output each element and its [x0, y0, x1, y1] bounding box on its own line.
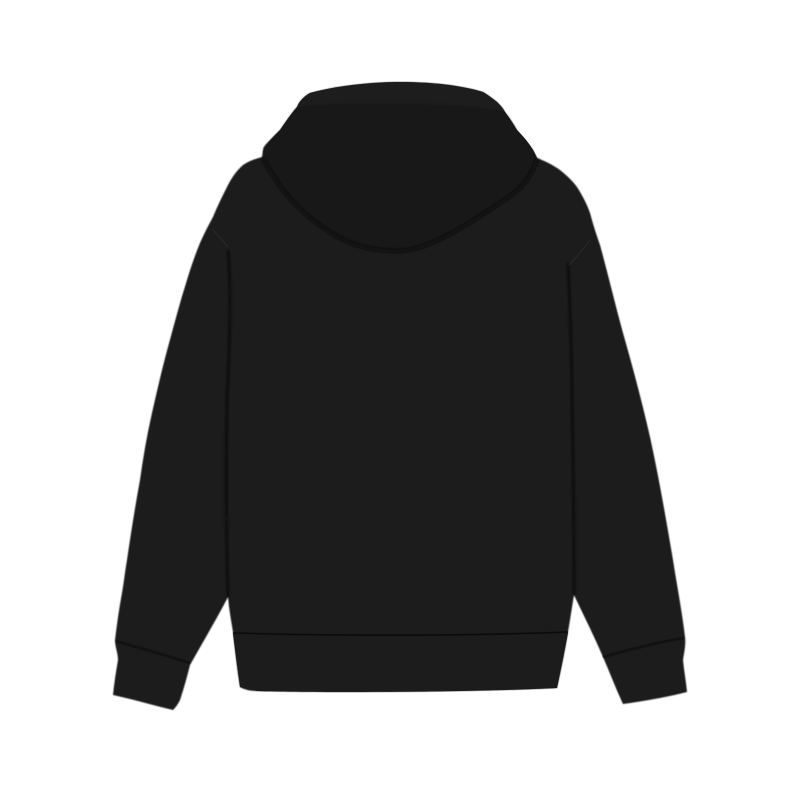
hood shadow line: [263, 158, 537, 251]
right cuff seam: [603, 638, 684, 657]
hem seam: [233, 632, 568, 635]
side seams: [226, 250, 574, 597]
hood panel: [263, 104, 537, 250]
garment silhouette: [113, 82, 687, 710]
hem rib band: [233, 632, 568, 692]
armhole seams: [212, 229, 590, 265]
hood top fold: [297, 82, 505, 112]
left cuff seam: [116, 641, 190, 663]
